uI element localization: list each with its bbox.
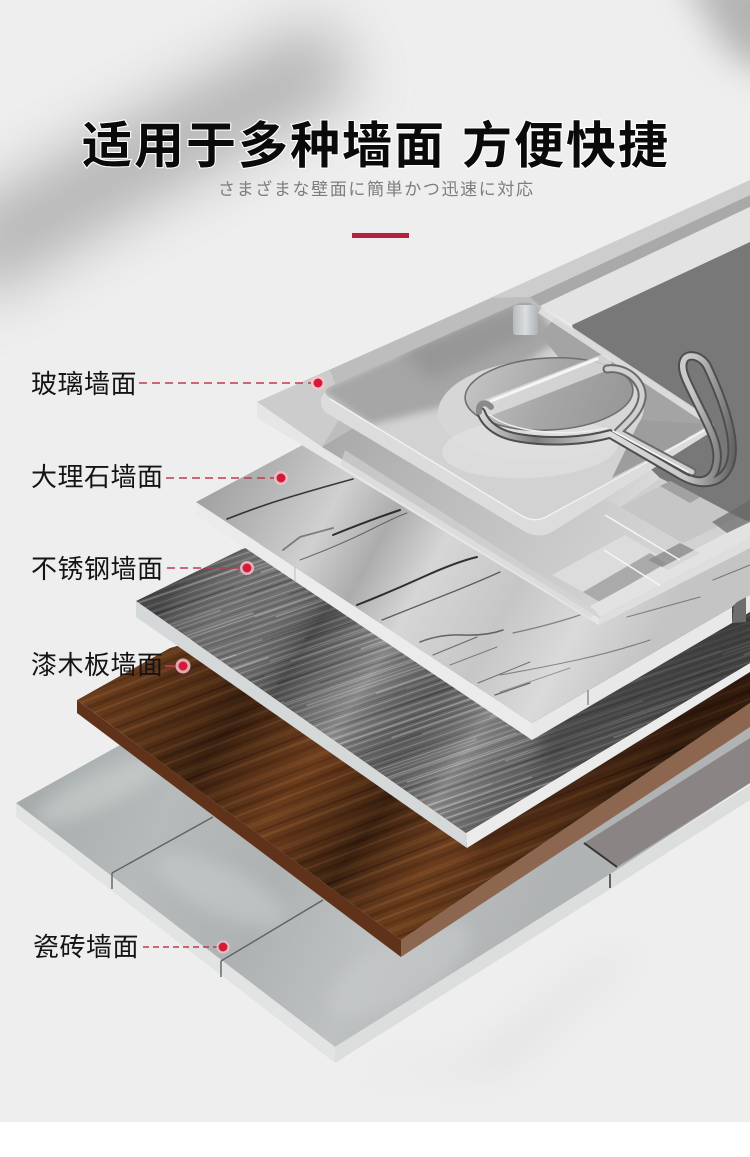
marble top face xyxy=(196,300,750,723)
panel: marble layer xyxy=(196,446,750,740)
label: tile wall xyxy=(33,932,230,962)
hook wire xyxy=(479,356,732,482)
title: 方便快捷 xyxy=(462,118,670,174)
hook inner disc xyxy=(463,354,635,434)
steel side edges xyxy=(136,601,467,848)
glass top rim bands xyxy=(490,180,750,298)
marble side edges xyxy=(196,502,532,740)
plate body xyxy=(321,303,714,536)
tile front edges xyxy=(16,803,335,1063)
label: stainless steel wall: 不锈钢墙面 xyxy=(31,554,164,584)
label: marble wall: 大理石墙面 xyxy=(31,462,164,492)
glass reflected rectangles xyxy=(552,481,750,617)
plate post xyxy=(513,305,538,335)
tile shading patches xyxy=(29,744,484,1036)
clear rod xyxy=(487,363,603,408)
title: 适用于多种墙面 xyxy=(82,118,446,174)
tile seams xyxy=(112,817,617,977)
plate rim highlight xyxy=(330,399,704,520)
subtitle: さまざまな壁面に簡単かつ迅速に対応 xyxy=(218,179,533,199)
panel: lacquered wood layer xyxy=(77,641,750,957)
label: marble wall xyxy=(31,462,288,492)
panel: glass layer xyxy=(257,180,750,625)
glass front edges xyxy=(257,402,599,625)
plate see-through shading xyxy=(320,295,720,478)
title xyxy=(82,118,670,174)
marble seam xyxy=(294,567,296,581)
wood top face xyxy=(77,641,750,940)
panel: white footer xyxy=(0,1122,750,1157)
label: glass wall xyxy=(31,369,325,399)
panel: adhesive plate xyxy=(320,295,720,536)
wood side edges xyxy=(77,700,401,957)
label: lacquered wood wall: 漆木板墙面 xyxy=(31,650,164,680)
tile top face xyxy=(16,600,750,1047)
steel top face xyxy=(136,544,750,833)
label: stainless steel wall xyxy=(31,554,254,584)
label: glass wall: 玻璃墙面 xyxy=(31,369,137,399)
icon: stainless hook xyxy=(436,354,732,483)
panel: ceramic tile layer xyxy=(16,703,750,1063)
translucent lower glass xyxy=(322,400,750,618)
glass top face left xyxy=(257,285,545,480)
panel: brushed stainless steel layer xyxy=(136,544,750,848)
plate top face xyxy=(325,302,710,521)
glass dark area right xyxy=(572,242,750,522)
red accent bar xyxy=(352,233,409,238)
hook base disc xyxy=(436,356,646,464)
marble veins xyxy=(227,479,750,695)
label: tile wall: 瓷砖墙面 xyxy=(33,932,139,962)
